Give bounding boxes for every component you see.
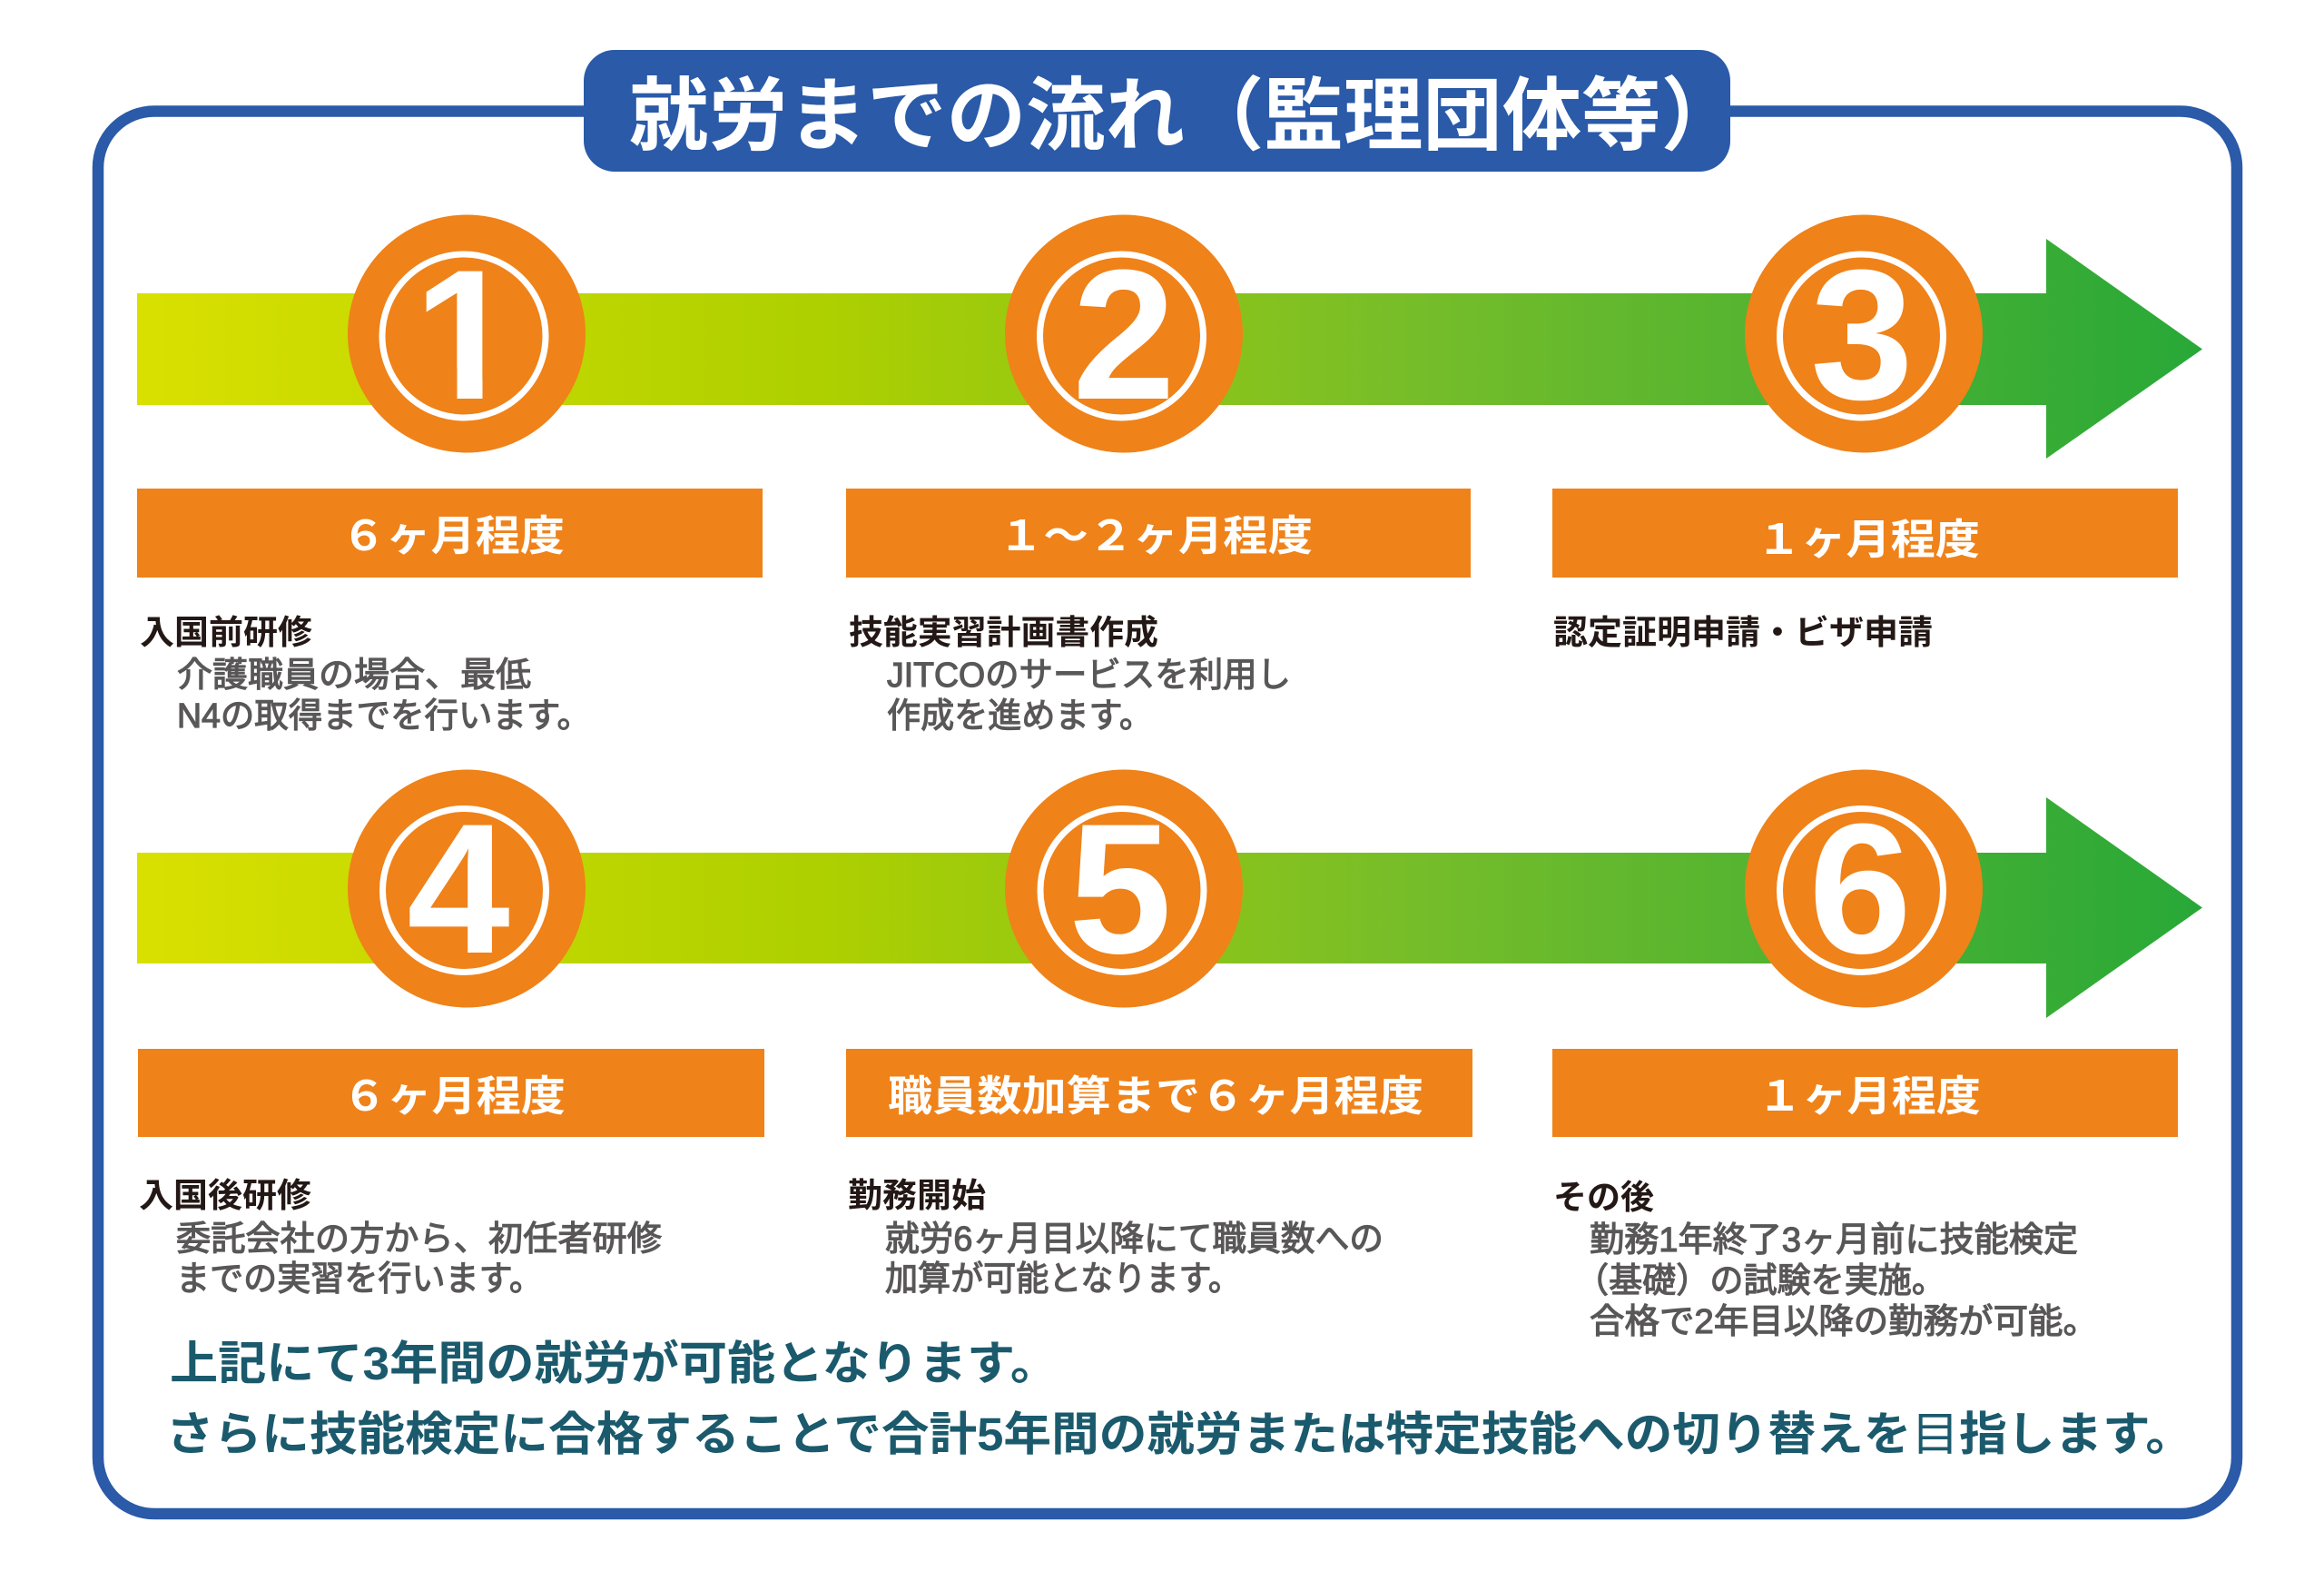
arrow: top row gradient arrow xyxy=(137,239,2202,459)
text block: step 1 description: 介護職員の場合、最低 xyxy=(177,657,531,695)
duration bar: step 6: １ヶ月程度 xyxy=(1758,1072,1981,1120)
step 3 number badge: 3 xyxy=(1810,232,1914,439)
text block: step 6 description: （基礎）の試験を実施。 xyxy=(1575,1262,1945,1300)
step 4 number badge xyxy=(348,770,586,1008)
step 1 number badge: 1 xyxy=(414,232,517,439)
text block: step 2 description: 作成を進めます。 xyxy=(887,697,1153,736)
title banner: 就労までの流れ（監理団体等） xyxy=(629,71,1740,161)
duration bar: step 2 xyxy=(846,489,1471,578)
closing statement: さらに技能検定に合格することで合計5年間の就労または特定技能への切り替えを 目指します。 xyxy=(166,1408,2193,1460)
step 5 number badge: 5 xyxy=(1068,786,1172,993)
duration bar: step 6 xyxy=(1552,1049,2178,1137)
step 2 number badge xyxy=(1005,214,1243,452)
step 3 number badge xyxy=(1745,214,1983,452)
step 1 number badge xyxy=(348,214,586,452)
arrow: bottom row gradient arrow xyxy=(137,797,2202,1018)
duration bar: step 1 xyxy=(137,489,763,578)
step 4 number badge: 4 xyxy=(407,786,510,993)
text block: step 1 description xyxy=(140,614,591,736)
text block: step 5 description: 勤務開始 xyxy=(848,1177,986,1214)
duration bar: step 3: １ヶ月程度 xyxy=(1757,516,1980,563)
text block: step 4 description: 入国後研修 xyxy=(139,1177,311,1214)
duration bar: step 3 xyxy=(1552,489,2178,578)
text block: step 4 description xyxy=(139,1177,662,1299)
text block: step 1 description: N4の取得までを行います。 xyxy=(177,697,591,736)
text block: step 6 description: 勤務1年終了3ヶ月前に技能検定 xyxy=(1590,1221,2078,1260)
text block: step 6 description xyxy=(1553,1179,2098,1341)
duration bar: step 4 xyxy=(138,1049,764,1137)
text block: step 5 description: 加算が可能となります。 xyxy=(885,1260,1241,1299)
text block: step 4 description: 委託会社の方から、初任者研修 xyxy=(176,1220,662,1259)
text block: step 5 description: 就労6ヶ月目以降にて職員数への xyxy=(885,1220,1384,1259)
step 6 number badge xyxy=(1745,770,1983,1008)
text block: step 6 description: 合格で2年目以降の勤務が可能。 xyxy=(1590,1303,2098,1341)
text block: step 1 description: 入国前研修 xyxy=(140,614,312,651)
duration bar: step 1: ６ヶ月程度 xyxy=(341,512,565,559)
text block: step 2 description xyxy=(849,614,1291,736)
closing statement xyxy=(166,1338,2193,1460)
text block: step 4 description: までの実習を行います。 xyxy=(176,1260,543,1299)
text block: step 2 description: 技能実習計画書作成 xyxy=(849,614,1158,651)
step 6 number badge: 6 xyxy=(1808,786,1912,993)
duration bar: step 5: 職員数加算まで６ヶ月程度 xyxy=(888,1072,1423,1120)
step 2 number badge: 2 xyxy=(1072,232,1176,439)
text block: step 3 description: 認定証明申請・ビザ申請 xyxy=(1553,614,1933,651)
duration bar: step 5 xyxy=(846,1049,1472,1137)
text block: step 2 description: JITCOのサービスを利用し xyxy=(887,657,1291,695)
text block: step 6 description: その後 xyxy=(1553,1179,1654,1216)
duration bar: step 2: １～２ヶ月程度 xyxy=(999,512,1313,559)
closing statement: 上記にて3年間の就労が可能となります。 xyxy=(170,1338,1059,1389)
duration bar: step 4: ６ヶ月程度 xyxy=(342,1072,566,1120)
text block: step 5 description xyxy=(848,1177,1384,1299)
step 5 number badge xyxy=(1005,770,1243,1008)
